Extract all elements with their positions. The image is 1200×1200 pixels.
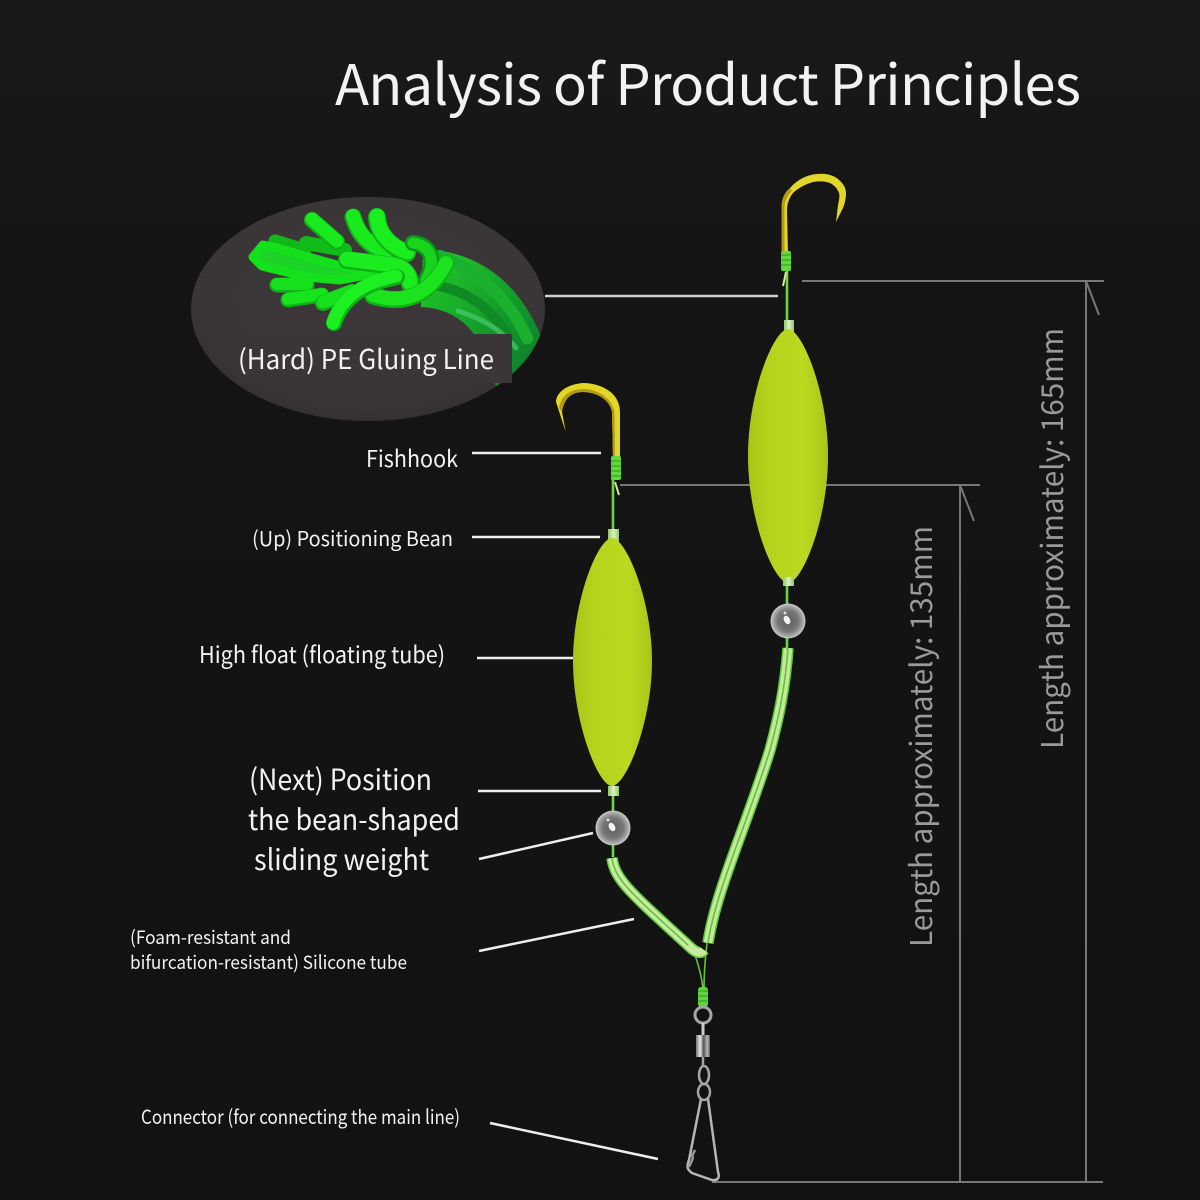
label: next position, sliding weight: the bean-shaped: [248, 797, 460, 839]
icon: right float: [748, 329, 828, 583]
icon: lower knot: [698, 987, 708, 1007]
label: silicone tube: (Foam-resistant and: [130, 924, 291, 950]
label: next position, sliding weight: (Next) Position: [249, 757, 432, 799]
icon: left knot: [611, 456, 621, 495]
title: Analysis of Product Principles: [335, 41, 1081, 122]
icon: green braided line: [253, 216, 528, 390]
icon: lower bean: [608, 786, 619, 796]
dimension lines: [620, 281, 1104, 1182]
icon: right sliding weight: [770, 604, 806, 638]
label: silicone tube: bifurcation-resistant) Silicone tube: [130, 949, 407, 975]
icon: left hook: [556, 383, 620, 460]
label: length 135mm: Length approximately: 135mm: [897, 526, 941, 947]
icon: right hook: [782, 174, 846, 254]
icon: sliding weight: [596, 810, 630, 846]
icon: high float: [573, 538, 652, 786]
silicone tube assembly: [612, 648, 788, 990]
label: next position, sliding weight: sliding weight: [254, 837, 429, 879]
panel: PE gluing line detail: [191, 197, 545, 421]
icon: upper bean: [608, 529, 619, 542]
icon: swivel connector and snap: [688, 1007, 719, 1180]
label: connector: Connector (for connecting the main line): [141, 1101, 460, 1130]
label: up positioning bean: (Up) Positioning Bean: [252, 522, 453, 552]
label: silicone tube: [130, 924, 407, 975]
label: PE gluing line: (Hard) PE Gluing Line: [238, 338, 494, 377]
label: high float: High float (floating tube): [199, 636, 445, 670]
left rig: fishhook, float, bead: [556, 383, 652, 857]
icon: right upper bean: [784, 320, 794, 332]
label: fishhook: Fishhook: [366, 440, 458, 474]
icon: right knot: [781, 251, 791, 286]
icon: right line: [786, 265, 788, 650]
label: length 165mm: Length approximately: 165mm: [1028, 328, 1072, 749]
leader lines: [472, 296, 778, 1159]
icon: left line: [612, 470, 614, 857]
icon: right lower bean: [783, 577, 794, 586]
label backing panel: [238, 334, 512, 383]
right rig: fishhook, float, bead: [748, 174, 846, 650]
label: next position, sliding weight: [248, 757, 460, 879]
